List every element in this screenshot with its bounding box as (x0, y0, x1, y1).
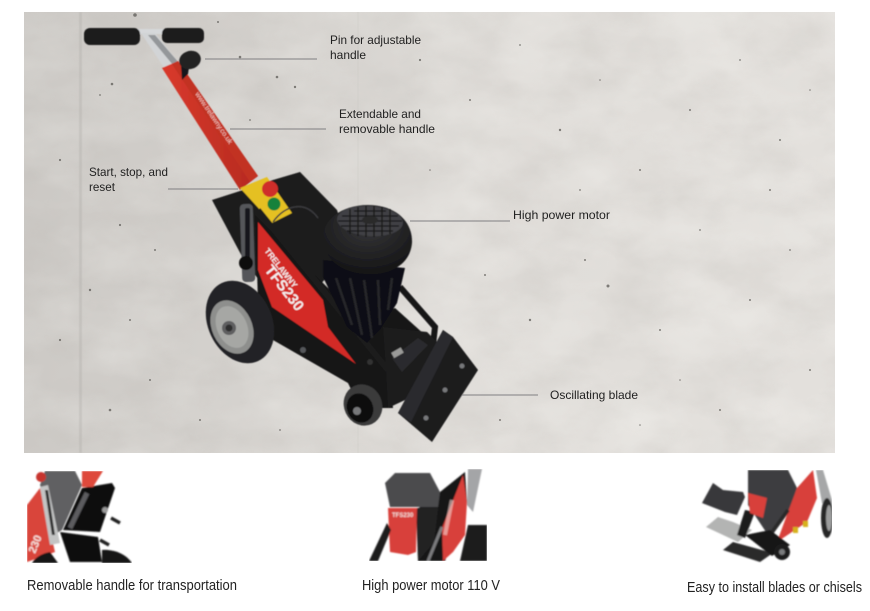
frame loop behind motor (400, 287, 435, 345)
rear plate and tray (212, 172, 350, 320)
blade mount (383, 327, 440, 408)
thumbnail: blades and chisels (702, 470, 833, 562)
machine: floor scraper (84, 28, 478, 442)
callout: start, stop and reset: reset (89, 180, 116, 194)
thumbnail: removable handle (27, 471, 132, 563)
callout: extendable and removable handle (230, 107, 435, 136)
red handle shaft (162, 61, 258, 190)
callout: pin for adjustable handle: Pin for adjustable (330, 33, 421, 47)
control box (240, 177, 318, 223)
thumbnail: high power motor (369, 469, 487, 561)
callout: pin for adjustable handle: handle (330, 48, 366, 62)
callout: pin for adjustable handle (205, 33, 421, 62)
adjustment pin knob (177, 48, 203, 80)
callout: start, stop and reset: Start, stop, and (89, 165, 168, 179)
machine body (255, 210, 425, 408)
handle grips (84, 28, 204, 69)
machine body: TRELAWNY (262, 246, 300, 290)
thumbnail: removable handle: 230 (27, 534, 45, 555)
machine body: TFS230 (261, 262, 307, 315)
caption: high power motor: High power motor 110 V (362, 577, 500, 594)
oscillating blade (398, 330, 478, 442)
red handle shaft: www.trelawny.co.uk (193, 90, 234, 146)
callout: start, stop and reset (89, 165, 238, 194)
caption: removable handle: Removable handle for transportation (27, 577, 237, 594)
front small wheel (337, 378, 389, 432)
callout: oscillating blade: Oscillating blade (550, 388, 638, 402)
callout: extendable and removable handle: removable handle (339, 122, 435, 136)
callout: extendable and removable handle: Extendable and (339, 107, 421, 121)
callout: high power motor: High power motor (513, 208, 610, 222)
motor (323, 204, 412, 343)
panel: concrete wall background (24, 12, 835, 453)
thumbnail: high power motor: TFS230 (392, 513, 414, 519)
rear large wheel (193, 270, 287, 374)
